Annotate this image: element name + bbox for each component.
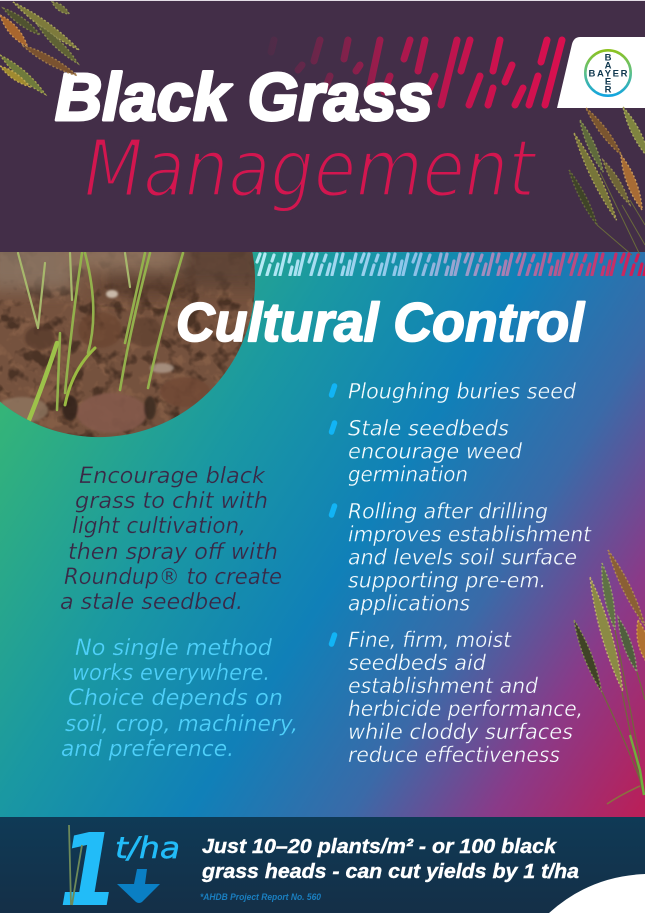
text block: no single method: works everywhere. [72,661,270,686]
bullet item: fine firm moist: seedbeds aid [348,651,486,676]
icon: grass heads top left [0,0,82,97]
bullet item: rolling: improves establishment [348,522,592,548]
icon: grass head bottom right [570,548,645,804]
footnote: *AHDB Project Report No. 560 [200,892,321,902]
text block: no single method [61,636,298,762]
header band [0,0,645,252]
statistic: 1 t/ha with arrow: t/ha [115,831,180,865]
heading: Cultural Control: Cultural Control [176,291,586,353]
bullet item: fine firm moist [332,628,583,768]
pattern: dashes in header [271,40,562,105]
text block: no single method: Choice depends on [68,686,283,711]
corner white circle [549,874,645,913]
icon: Bayer cross logo: E [605,76,611,87]
bullet item: rolling [332,500,592,616]
blurred soil background [0,252,255,301]
text block: stale seedbed advice: Roundup® to create [64,565,282,590]
icon: Bayer cross logo [585,50,631,96]
bullet item: fine firm moist: herbicide performance, [348,697,583,722]
text block: stale seedbed advice: grass to chit with [75,489,268,514]
icon: grass heads top right [566,105,645,255]
bullet item: stale seedbeds: encourage weed [348,440,522,464]
icon: Bayer cross logo: R [605,84,612,95]
icon: Bayer cross logo: BAYER [588,68,628,79]
bullet item: fine firm moist: establishment and [348,674,538,699]
bullet item: ploughing: Ploughing buries seed [348,380,576,404]
text block: no single method: No single method [75,636,273,661]
photo: soil with seedlings [0,240,265,438]
icon: Bayer cross logo: A [605,60,612,71]
bullet item: fine firm moist: while cloddy surfaces [348,720,573,745]
pattern: dashes strip above Cultural Control [255,252,645,276]
text block: no single method: soil, crop, machinery, [65,712,298,737]
text block: no single method: and preference. [61,737,234,762]
callout: yield impact: grass heads - can cut yields by 1 t/ha [201,861,579,883]
callout: yield impact [201,836,579,883]
bullet item: fine firm moist: reduce effectiveness [348,743,560,768]
soil clods [0,290,210,433]
text block: stale seedbed advice: a stale seedbed. [60,590,243,615]
icon: down arrow [117,869,160,903]
icon: grass stalk [69,825,82,905]
icon: Bayer cross logo: B [605,52,612,63]
bullet item: stale seedbeds: germination [348,462,468,488]
title: Management: Management [84,123,538,215]
bullet item: stale seedbeds: Stale seedbeds [348,416,509,442]
bullet item: rolling: and levels soil surface [348,546,577,570]
callout: yield impact: Just 10–20 plants/m² - or 100 black [202,836,557,858]
bullet item: rolling: applications [348,592,470,616]
logo panel [557,37,645,108]
seedlings [18,253,183,425]
bullet item: rolling: supporting pre-em. [348,568,546,594]
statistic: 1 t/ha with arrow [59,812,180,913]
text block: stale seedbed advice [60,464,282,615]
bullet list [332,380,592,768]
text block: stale seedbed advice: then spray off with [68,540,278,565]
main gradient background [0,252,645,818]
title: Black Grass: Black Grass [55,60,433,135]
bullet item: fine firm moist: Fine, firm, moist [348,628,512,653]
bullet item: rolling: Rolling after drilling [348,500,548,524]
text block: stale seedbed advice: Encourage black [79,464,266,489]
bullet item: stale seedbeds [332,416,522,488]
text block: stale seedbed advice: light cultivation, [72,514,246,539]
bottom band [0,817,645,913]
